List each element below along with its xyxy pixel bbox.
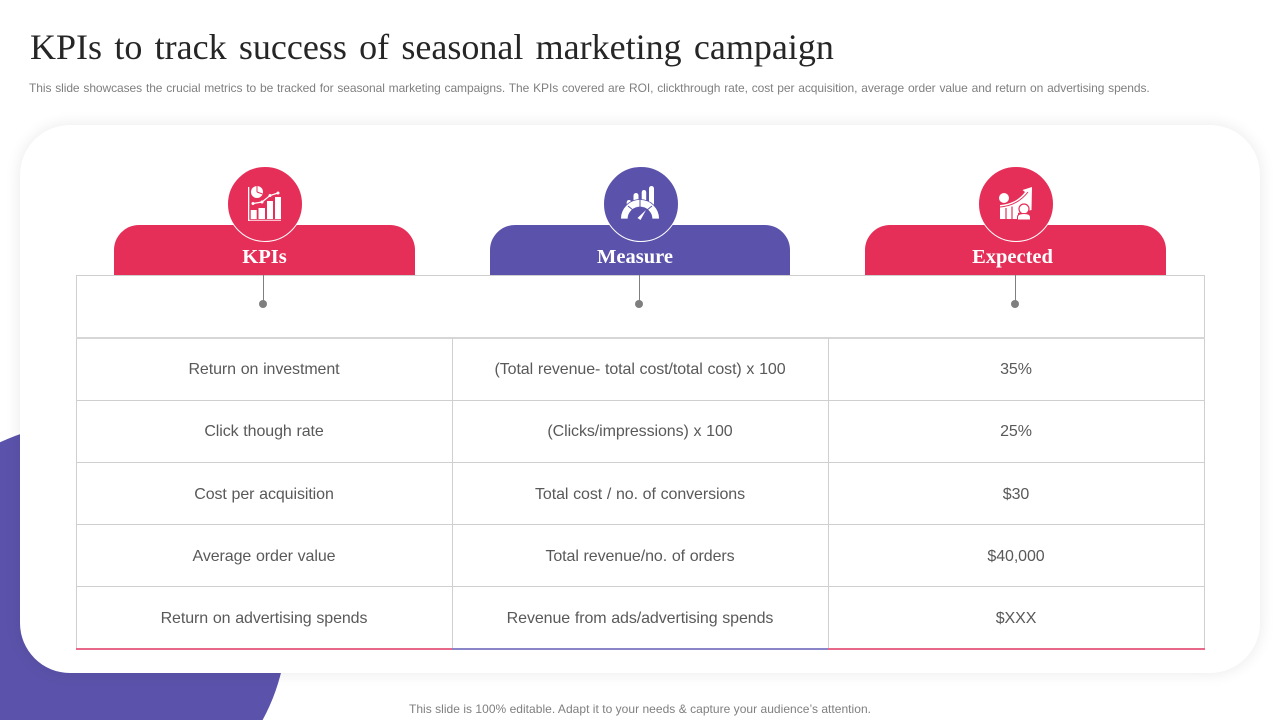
connector: column 3 [1011,275,1019,308]
header tab: KPIs [114,225,415,275]
decorative purple circle [0,434,281,720]
heading: Measure: Measure [597,246,673,268]
row 2: measure: (Clicks/impressions) x 100 [547,423,733,440]
row 1: measure: (Total revenue- total cost/total cost) x 100 [494,361,786,378]
header tab: Expected [865,225,1166,275]
row 1: expected: 35% [1000,361,1032,378]
connector: column 1 [259,275,267,308]
row 3: KPI: Cost per acquisition [194,486,334,503]
icon: chart with pie [248,186,281,221]
row 5: expected: $XXX [996,610,1036,627]
icon circle: KPIs [227,166,303,242]
row 4: KPI: Average order value [193,548,335,565]
table: KPI grid [76,275,1205,650]
row 5: measure: Revenue from ads/advertising spends [507,610,773,627]
icon: gauge with bars [620,186,660,220]
title: KPIs to track success of seasonal marketing campaign [30,27,834,67]
icon circle: Expected [978,166,1054,242]
row 2: KPI: Click though rate [204,423,324,440]
icon circle: Measure [603,166,679,242]
row 3: expected: $30 [1003,486,1029,503]
row 4: expected: $40,000 [987,548,1045,565]
row 4: measure: Total revenue/no. of orders [545,548,735,565]
row 2: expected: 25% [1000,423,1032,440]
connector: column 2 [635,275,643,308]
subtitle: This slide showcases the crucial metrics to be tracked for seasonal marketing campaigns. The KPIs covered are ROI, clickthrough rate, cost per acquisition, average order value and return on advertising spends. [29,81,1150,95]
table frame [76,275,1205,650]
row 1: KPI: Return on investment [188,361,340,378]
heading: KPIs: KPIs [242,246,287,268]
header tab: Measure [490,225,790,275]
row 5: KPI: Return on advertising spends [161,610,367,627]
row 3: measure: Total cost / no. of conversions [535,486,745,503]
heading: Expected: Expected [972,246,1053,268]
panel: main white card [20,125,1260,673]
footer note: This slide is 100% editable. Adapt it to your needs & capture your audience’s attention. [409,702,871,716]
icon: growth arrow with person [999,187,1032,220]
